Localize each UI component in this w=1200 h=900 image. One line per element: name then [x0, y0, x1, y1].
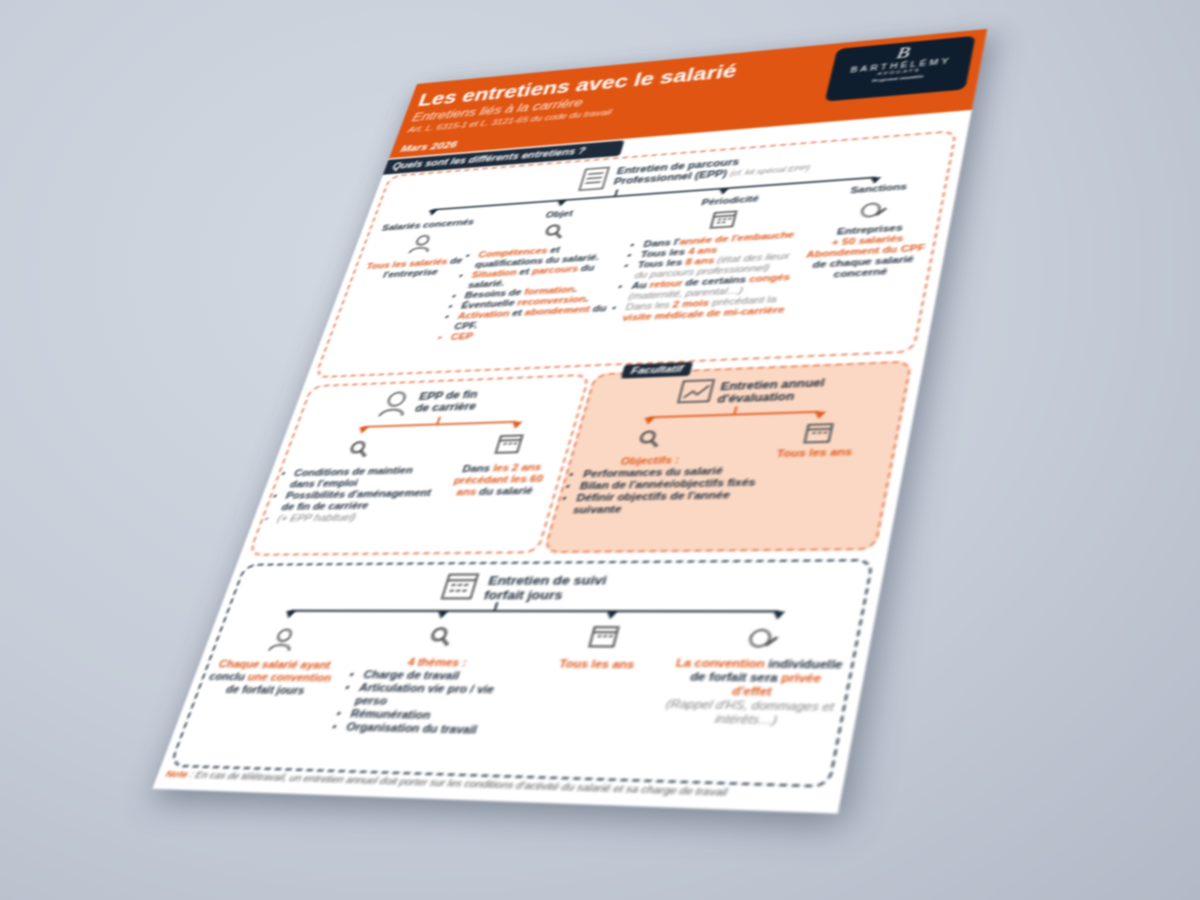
column: salariés concernés: Tous les salariés de l'entreprise [365, 256, 464, 280]
column: périodicité: Au retour de certains congés (maternité, parental…) [627, 272, 791, 302]
column: objet: Situation et parcours du salarié. [467, 263, 596, 290]
panel: entretien annuel (facultatif) [543, 361, 913, 553]
logo: AVOCATS [877, 68, 921, 77]
column: thèmes: Charge de travail [362, 669, 461, 682]
column: sanction: (Rappel d'HS, dommages et intérêts…) [665, 698, 835, 727]
block: conditions: Conditions de maintien dans l'emploi [288, 465, 414, 490]
block: objectifs: Performances du salarié [582, 466, 724, 480]
column: thèmes: Articulation vie pro / vie perso [353, 682, 496, 708]
column: sanctions: + 50 salariés [831, 234, 904, 248]
heading: Professionnel (EPP) (cf. kit spécial EPP) [612, 164, 811, 187]
heading [413, 388, 479, 414]
heading [716, 377, 826, 405]
column: objet: Compétences et qualifications du salarié. [474, 245, 601, 270]
icon: senior [377, 390, 408, 418]
column: bénéficiaires: Chaque salarié ayant conclu une convention de forfait jours [207, 659, 333, 697]
column: objet: Besoins de formation. [463, 285, 579, 301]
page: infographic sheet [152, 29, 987, 814]
note: Note : En cas de télétravail, un entretien annuel doit porter sur les conditions d'activité du salarié et sa charge de travail [164, 769, 728, 799]
column: périodicité: Dans l'année de l'embauche [642, 230, 795, 249]
column: périodicité: Périodicité [700, 194, 760, 208]
tag: facultatif: Facultatif [630, 364, 684, 377]
column: périodicité: Dans les 2 mois précédant la visite médicale de mi-carrière [621, 295, 786, 323]
column: sanction: La convention individuelle de forfait sera privée d'effet [674, 657, 844, 699]
section label [383, 140, 625, 175]
column: objet [437, 209, 608, 342]
column: objet: Activation et abondement du CPF. [453, 304, 608, 332]
block: conditions [264, 440, 433, 524]
column: salariés concernés: Salariés concernés [381, 218, 475, 233]
block: objectifs [561, 429, 757, 516]
icon: checklist [577, 166, 612, 192]
block: conditions: (+ EPP habituel) [276, 512, 357, 524]
icon: calendar [439, 572, 481, 601]
heading: forfait jours [482, 588, 565, 602]
column: thèmes: Organisation du travail [344, 721, 479, 737]
column: thèmes [331, 626, 496, 737]
tree connector [290, 610, 779, 612]
block: tous les ans: Tous les ans [775, 447, 853, 460]
tag: facultatif [621, 362, 693, 379]
heading: EPP de fin [417, 388, 479, 402]
logo: BARTHÉLÉMY [850, 57, 952, 75]
column: fréquence: Tous les ans [558, 658, 636, 671]
legal reference: Art. L. 6315-1 et L. 3121-65 du code du travail [406, 108, 613, 135]
logo [825, 36, 976, 102]
heading: Entretien de parcours [616, 156, 741, 176]
column: salariés concernés [365, 218, 475, 280]
column: sanctions: Abondement du CPF de chaque salarié concerné [805, 243, 926, 280]
column: fréquence [558, 624, 636, 671]
orange branch [363, 421, 517, 428]
block: objectifs: Bilan de l'année/objectifs fixés [578, 477, 757, 492]
icon: chart [676, 378, 717, 405]
section label: Quels sont les différents entretiens ? [391, 145, 587, 171]
header band [389, 29, 987, 158]
column: périodicité [611, 194, 796, 323]
panel: EPP [314, 130, 957, 378]
column: objet: CEP [449, 332, 474, 342]
block: tous les ans [775, 422, 854, 460]
block: objectifs: Définir objectifs de l'année suivante [572, 490, 731, 516]
block: délai [452, 433, 545, 498]
column: thèmes: 4 thèmes : [406, 657, 468, 669]
column: thèmes: Rémunération [349, 708, 432, 722]
logo: B [895, 45, 911, 62]
heading: Entretien annuel [719, 377, 826, 393]
heading [482, 573, 609, 604]
orange branch [649, 411, 819, 418]
panel: EPP fin de carrière [248, 374, 591, 556]
column: sanction [664, 627, 844, 728]
title: Les entretiens avec le salarié [415, 61, 739, 110]
block: conditions: Possibilités d'aménagement de fin de carrière [280, 488, 433, 513]
heading: de carrière [413, 400, 478, 414]
logo: Progresser ensemble [872, 75, 924, 84]
panel: forfait jours [169, 559, 874, 788]
column: objet: Éventuelle reconversion. [460, 294, 590, 311]
column: bénéficiaires [207, 627, 333, 698]
column: périodicité: Tous les 8 ans (état des lieux du parcours professionnel) [633, 251, 790, 281]
column: sanctions [804, 182, 927, 280]
heading: Entretien de suivi [487, 573, 609, 588]
column: périodicité: Tous les 4 ans [639, 245, 718, 260]
subtitle: Entretiens liés à la carrière [410, 97, 584, 124]
block: délai: Dans les 2 ans précédant les 60 ans du salarié [452, 462, 544, 498]
column: sanctions: Entreprises [836, 223, 904, 237]
column: sanctions: Sanctions [849, 182, 908, 196]
block: objectifs: Objectifs : [619, 455, 681, 467]
heading: d'évaluation [716, 390, 796, 405]
column: objet: Objet [544, 209, 574, 220]
tree connector [432, 177, 876, 210]
date: Mars 2026 [399, 139, 459, 154]
